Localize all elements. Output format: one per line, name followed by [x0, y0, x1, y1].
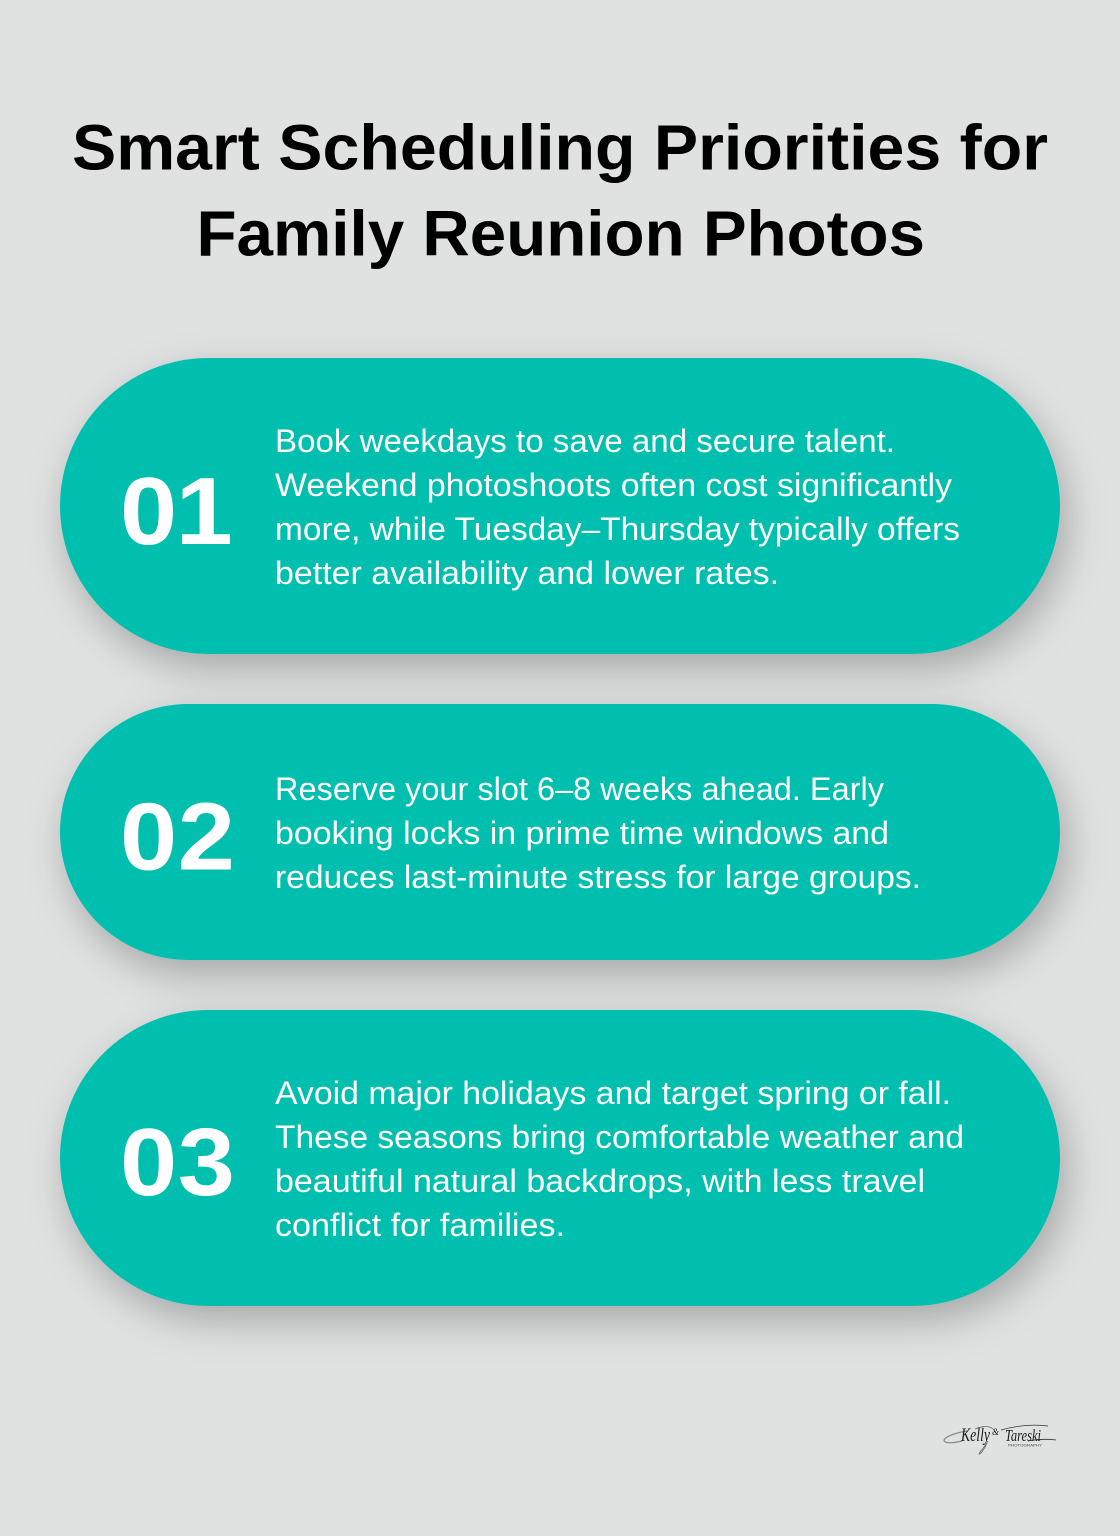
text block 03: Avoid major holidays and target spring or fall.: [275, 1075, 951, 1111]
text block 01: [275, 423, 960, 591]
text block 01: more, while Tuesday–Thursday typically offers: [275, 511, 960, 547]
logo: signature: Kelly: [960, 1425, 990, 1446]
text block 01: better availability and lower rates.: [275, 555, 779, 591]
pill background 02: [60, 704, 1060, 960]
text block 02: reduces last-minute stress for large groups.: [275, 859, 921, 895]
text block 03: beautiful natural backdrops, with less travel: [275, 1163, 925, 1199]
logo: signature: [944, 1425, 1056, 1454]
number 03: 03: [120, 1109, 235, 1216]
text block 03: These seasons bring comfortable weather and: [275, 1119, 964, 1155]
logo: signature: &: [992, 1427, 999, 1437]
logo: signature: PHOTOGRAPHY: [1008, 1444, 1043, 1448]
number 01: 01: [120, 458, 233, 565]
logo: signature: Tareski: [1005, 1426, 1041, 1445]
title: Family Reunion Photos: [196, 198, 925, 270]
text block 02: booking locks in prime time windows and: [275, 815, 889, 851]
panel: step 02: [60, 704, 1060, 960]
text block 02: [275, 771, 921, 895]
title: [72, 112, 1048, 270]
title: Smart Scheduling Priorities for: [72, 112, 1048, 184]
text block 02: Reserve your slot 6–8 weeks ahead. Early: [275, 771, 884, 807]
panel: step 01: [60, 358, 1060, 654]
text block 01: Book weekdays to save and secure talent.: [275, 423, 895, 459]
text block 01: Weekend photoshoots often cost significantly: [275, 467, 952, 503]
pill background 03: [60, 1010, 1060, 1306]
pill background 01: [60, 358, 1060, 654]
text block 03: [275, 1075, 964, 1243]
panel: step 03: [60, 1010, 1060, 1306]
number 02: 02: [120, 784, 235, 891]
text block 03: conflict for families.: [275, 1207, 565, 1243]
